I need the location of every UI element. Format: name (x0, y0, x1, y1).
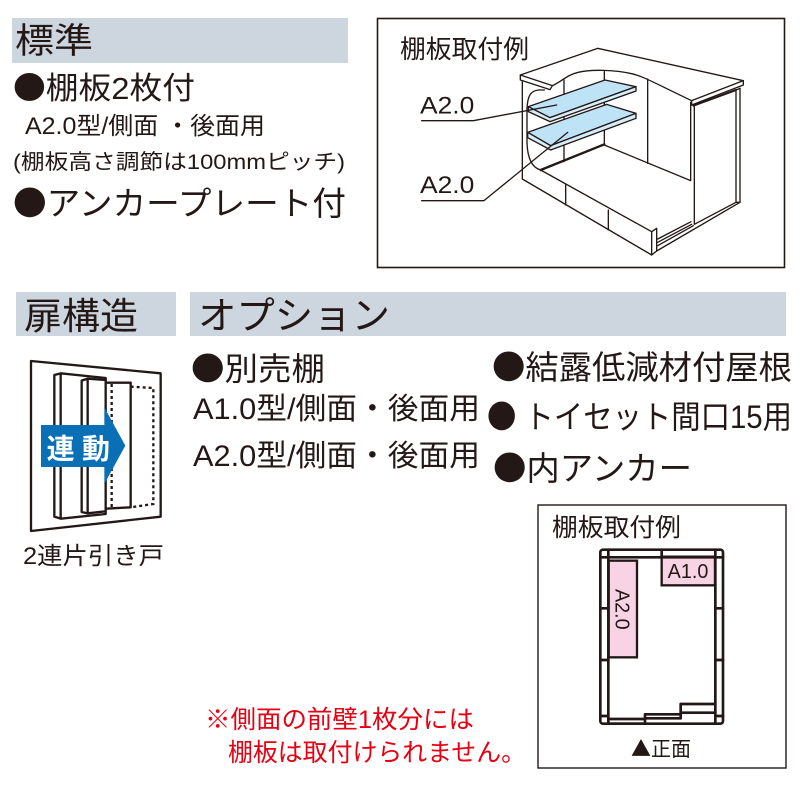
caption: two-panel sliding door: 2連片引き戸 (23, 543, 164, 570)
heading: standard (12, 18, 348, 63)
label: upper A2.0 with leader: A2.0 (420, 92, 474, 119)
text: A2.0 shelf: A2.0型/側面・後面用 (193, 440, 480, 473)
text: condensation reducing roof: ●結露低減材付屋根 (492, 341, 792, 389)
shelf: A2.0 side wall (609, 561, 637, 657)
label: front side: ▲正面 (631, 732, 691, 762)
text: shelf type and position: A2.0型/側面 ・後面用 (25, 113, 265, 140)
floor plan (600, 550, 723, 762)
heading: standard: 標準 (15, 22, 93, 61)
text: inner anchor: ●内アンカー (493, 442, 692, 490)
shelf: A1.0 rear wall (662, 557, 715, 585)
label: lower A2.0 with leader: A2.0 (420, 172, 474, 199)
red note: shelves cannot attach to one side wall: 棚板は取付けられません。 (228, 739, 526, 767)
text: A1.0 shelf: A1.0型/側面・後面用 (193, 393, 480, 426)
heading: shelf installation example: 棚板取付例 (552, 514, 681, 542)
heading: shelf installation example: 棚板取付例 (400, 36, 529, 64)
text: two shelves included: ●棚板2枚付 (13, 63, 195, 108)
illustration: storage shed cutaway (420, 48, 743, 255)
shelf: A1.0 rear wall: A1.0 (668, 560, 708, 583)
text: shelf height note: (棚板高さ調節は100mmピッチ) (13, 151, 345, 174)
arrow: linked motion: 連動 (47, 433, 110, 464)
shelf: A2.0 side wall: A2.0 (611, 589, 634, 630)
panel: options (190, 292, 792, 490)
label: lower A2.0 with leader (420, 132, 568, 201)
heading: options: オプション (198, 296, 390, 338)
panel: 3D shelf installation example (378, 18, 784, 268)
arrow: linked motion (41, 407, 125, 484)
panel: door structure (16, 292, 176, 570)
text: separately sold shelves: ●別売棚 (191, 344, 325, 390)
shelf: lower A2.0 (528, 104, 636, 150)
heading: door structure (16, 292, 176, 337)
illustration: linked sliding door (31, 361, 161, 531)
text: anchor plate included: ●アンカープレート付 (13, 177, 346, 225)
label: upper A2.0 with leader (420, 92, 557, 121)
heading: door structure: 扉構造 (24, 296, 138, 337)
shelf: upper A2.0 (528, 80, 636, 122)
red note: shelves cannot attach to one side wall: ※側面の前壁1枚分には (205, 700, 474, 736)
panel: floor plan shelf example (538, 505, 786, 768)
red note: shelves cannot attach to one side wall (205, 700, 526, 767)
heading: options (190, 292, 786, 338)
panel: standard equipment (12, 18, 348, 225)
